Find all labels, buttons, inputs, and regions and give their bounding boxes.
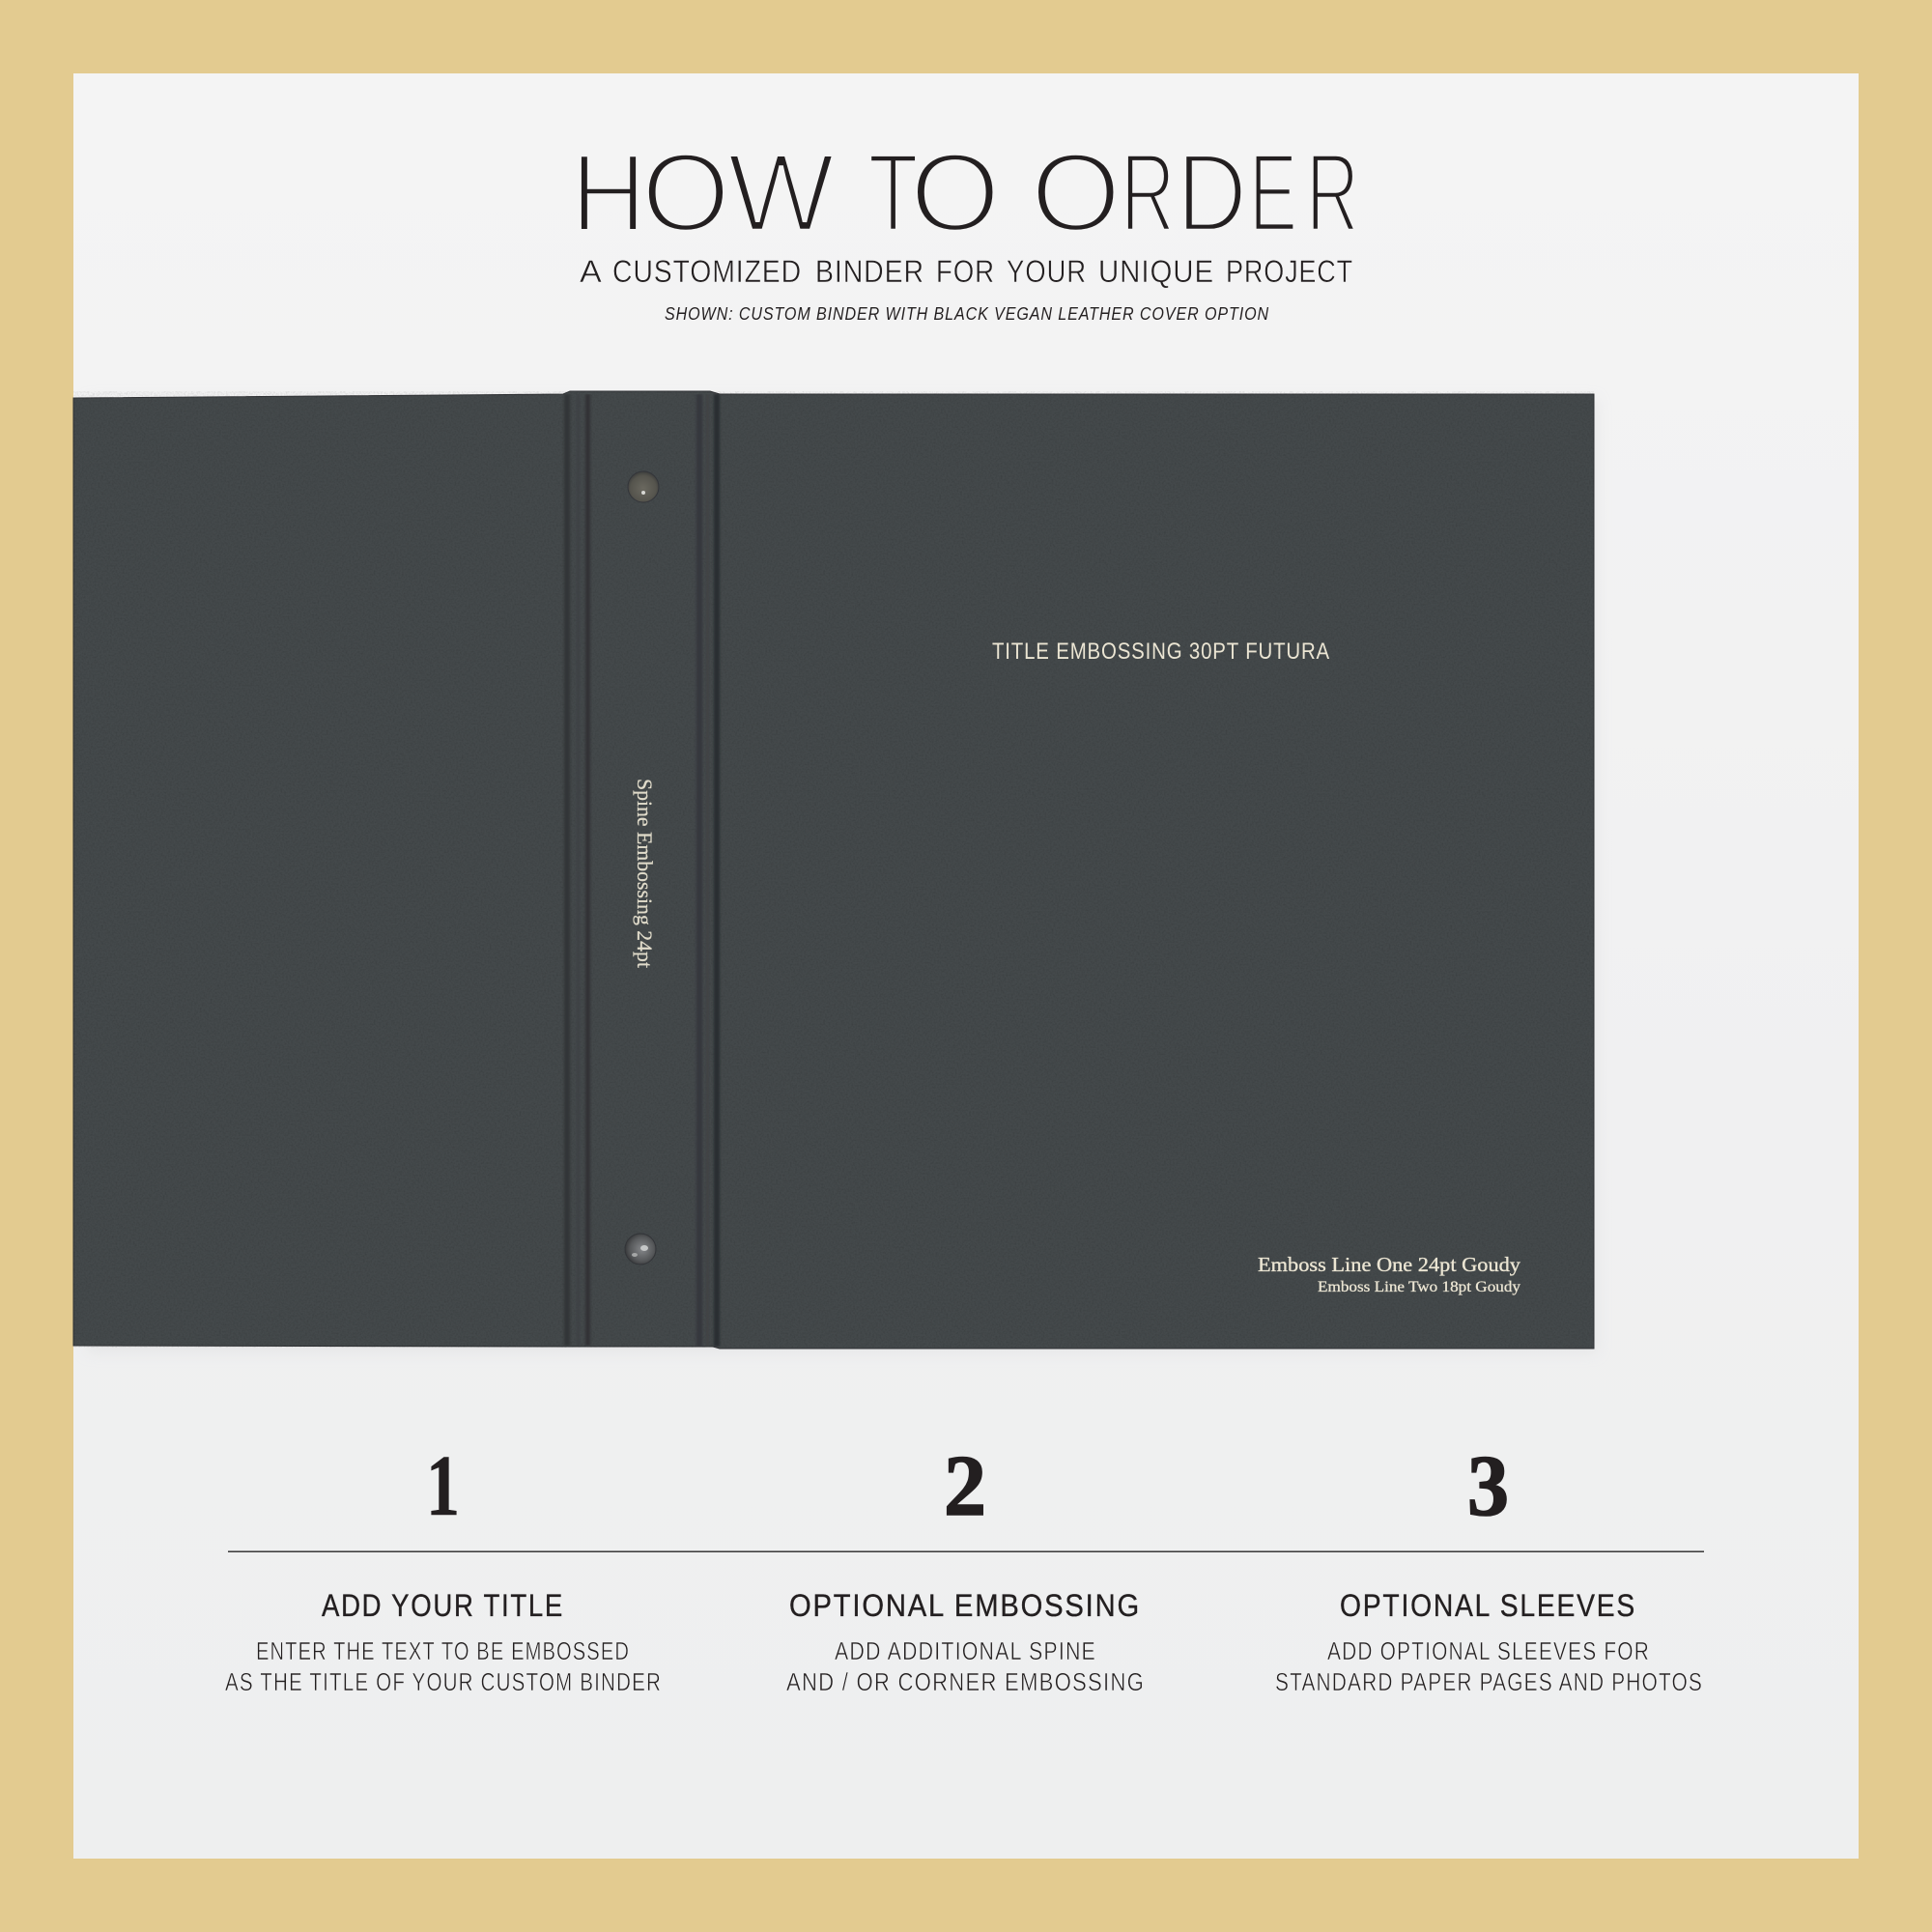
title: E bbox=[1249, 131, 1297, 255]
step 3 description: ADD OPTIONAL SLEEVES FOR bbox=[1327, 1638, 1650, 1665]
step 2 text bbox=[786, 1588, 1145, 1696]
step 2 heading: OPTIONAL EMBOSSING bbox=[789, 1588, 1141, 1623]
step 2 description: AND / OR CORNER EMBOSSING bbox=[786, 1669, 1145, 1696]
binder shadow bbox=[87, 400, 1597, 1352]
title: H bbox=[571, 131, 646, 255]
step 1 description bbox=[225, 1638, 662, 1696]
step 2 number: 2 bbox=[944, 1438, 986, 1534]
step 1 text bbox=[225, 1588, 662, 1696]
step 1 description: ENTER THE TEXT TO BE EMBOSSED bbox=[256, 1638, 630, 1665]
title: R bbox=[1306, 131, 1359, 255]
title: D bbox=[1177, 131, 1247, 255]
step 3 heading: OPTIONAL SLEEVES bbox=[1340, 1588, 1636, 1623]
step 3 description bbox=[1275, 1638, 1703, 1696]
binder photo bbox=[73, 391, 1597, 1352]
step 3 text bbox=[1275, 1588, 1703, 1696]
step 3 description: STANDARD PAPER PAGES AND PHOTOS bbox=[1275, 1669, 1703, 1696]
title: R bbox=[1121, 131, 1175, 255]
spine hinge right bbox=[696, 394, 720, 1347]
title: T bbox=[868, 131, 919, 255]
binder cover bbox=[73, 391, 1594, 1349]
rivet bottom bbox=[625, 1234, 656, 1264]
subtitle: A bbox=[580, 254, 603, 289]
title: O bbox=[641, 131, 730, 255]
title: W bbox=[727, 131, 835, 255]
subtitle: UNIQUE bbox=[1098, 254, 1214, 289]
subtitle: CUSTOMIZED bbox=[612, 254, 802, 289]
title: O bbox=[910, 131, 1001, 255]
title: O bbox=[1031, 131, 1121, 255]
step 1 description: AS THE TITLE OF YOUR CUSTOM BINDER bbox=[225, 1669, 662, 1696]
rivet top bbox=[628, 471, 659, 502]
note: shown option: SHOWN: CUSTOM BINDER WITH BLACK VEGAN LEATHER COVER OPTION bbox=[665, 304, 1269, 324]
step 2 description bbox=[786, 1638, 1145, 1696]
title embossing: TITLE EMBOSSING 30PT FUTURA bbox=[992, 639, 1330, 665]
subtitle: BINDER bbox=[815, 254, 924, 289]
step 2 description: ADD ADDITIONAL SPINE bbox=[835, 1638, 1096, 1665]
subtitle: YOUR bbox=[1007, 254, 1087, 289]
spine hinge left bbox=[564, 394, 590, 1346]
corner embossing line two: Emboss Line Two 18pt Goudy bbox=[1318, 1279, 1520, 1295]
subtitle: PROJECT bbox=[1226, 254, 1353, 289]
corner embossing line one: Emboss Line One 24pt Goudy bbox=[1258, 1253, 1521, 1276]
step 1 heading: ADD YOUR TITLE bbox=[322, 1588, 564, 1623]
subtitle: FOR bbox=[936, 254, 995, 289]
spine embossing: Spine Embossing 24pt bbox=[633, 779, 657, 969]
step 3 number: 3 bbox=[1467, 1438, 1509, 1534]
leather grain bbox=[73, 391, 1594, 1348]
step 1 number: 1 bbox=[426, 1438, 460, 1534]
divider rule bbox=[228, 1551, 1704, 1552]
